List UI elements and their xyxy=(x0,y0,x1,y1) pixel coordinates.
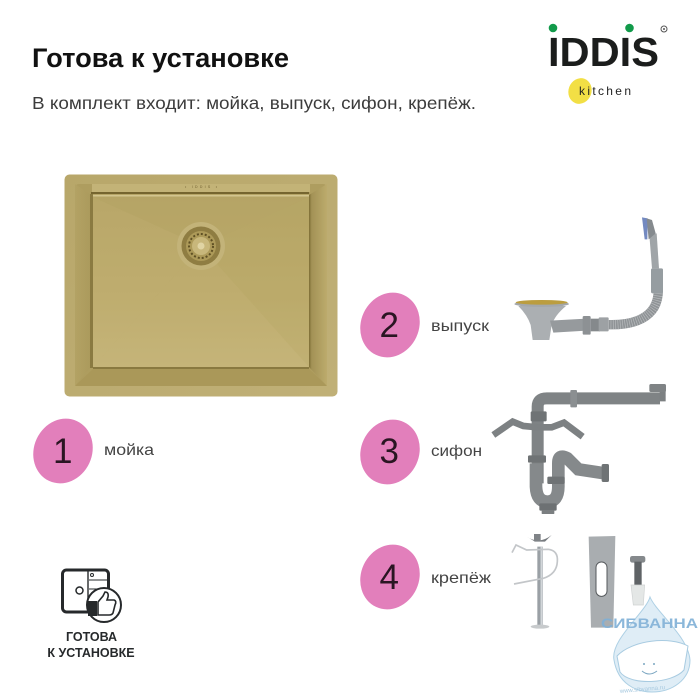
panel: gold sink xyxy=(64,174,338,396)
label: выпуск: выпуск xyxy=(431,318,490,335)
title: Готова к установке xyxy=(32,43,289,73)
badge 1 xyxy=(23,409,103,493)
watermark: Сибванна: СИБВАННА xyxy=(601,615,698,631)
icon: ready to install xyxy=(62,570,121,622)
badge 3 xyxy=(350,410,430,494)
illustration: siphon xyxy=(493,384,666,514)
badge 2: 2 xyxy=(380,306,399,345)
watermark: Сибванна xyxy=(601,597,698,695)
subtitle text: В комплект входит: мойка, выпуск, сифон, крепёж. xyxy=(32,93,476,113)
label: сифон: сифон xyxy=(431,443,482,460)
sink maker mark: • IDDIS • xyxy=(185,185,218,189)
illustration: mounting hardware xyxy=(512,534,645,629)
label: крепёж: крепёж xyxy=(431,570,491,587)
icon caption: ГОТОВА xyxy=(66,630,117,644)
badge 1: 1 xyxy=(53,432,72,471)
logo: IDDIS kitchen: kitchen xyxy=(579,84,631,98)
badge 4: 4 xyxy=(380,558,399,597)
badge 4 xyxy=(350,535,430,619)
icon: sink drain xyxy=(177,222,225,270)
illustration: drain outlet with overflow hose xyxy=(514,217,663,340)
badge 3: 3 xyxy=(380,432,399,471)
icon caption: К УСТАНОВКЕ xyxy=(47,646,135,660)
label: мойка: мойка xyxy=(104,442,154,459)
logo: IDDIS kitchen: IDDIS xyxy=(548,29,659,75)
icon caption xyxy=(47,630,135,660)
badge 2 xyxy=(350,283,430,367)
watermark: Сибванна: www.sibvanna.ru xyxy=(619,685,665,695)
logo: IDDIS kitchen xyxy=(548,24,667,107)
